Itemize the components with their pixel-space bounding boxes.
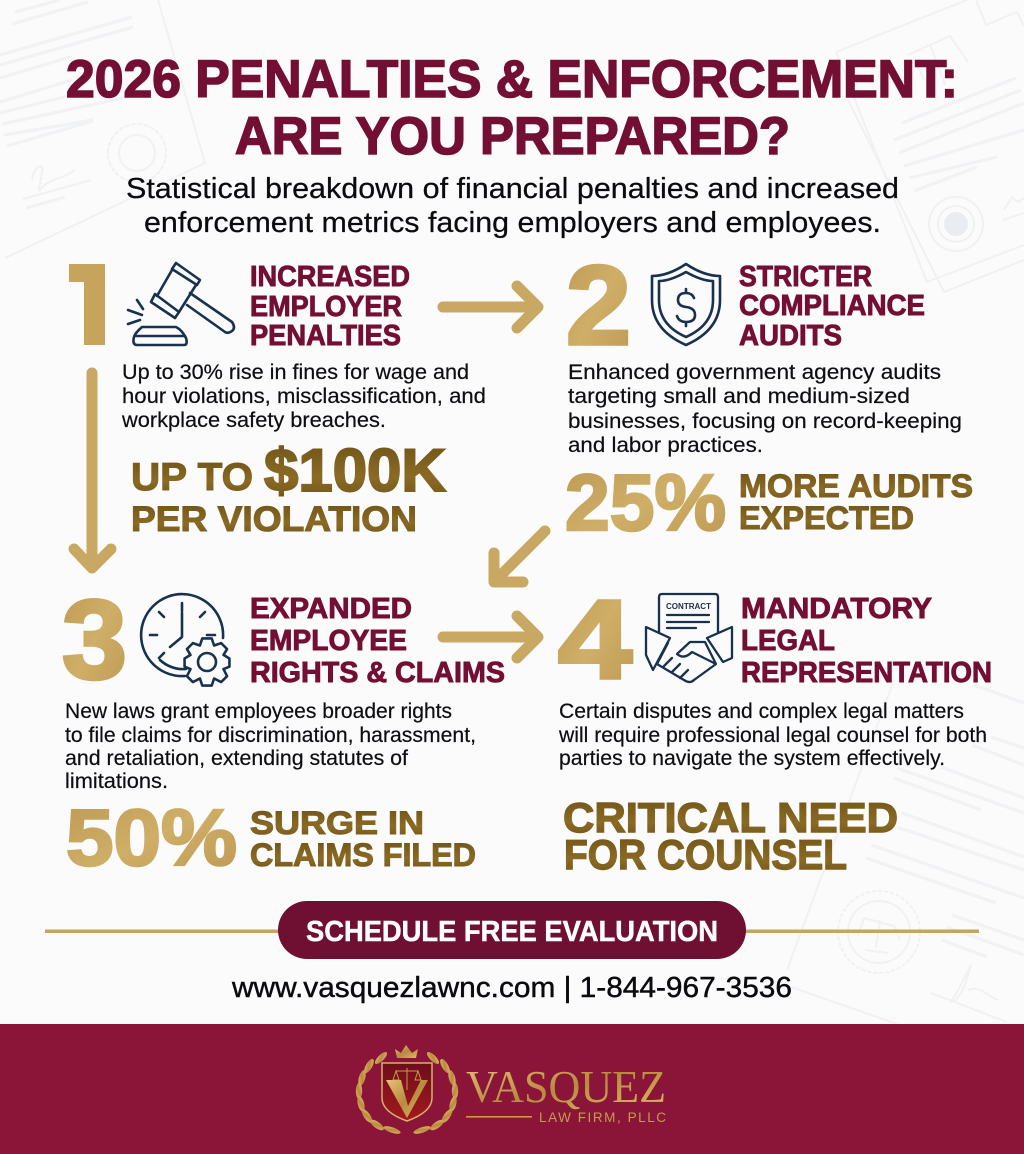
body text: Certain disputes and complex legal matters — [559, 699, 964, 723]
body text — [65, 699, 476, 793]
stat: 25% more audits expected: 25% — [565, 458, 726, 547]
body text: Up to 30% rise in fines for wage and — [122, 360, 469, 384]
heading — [250, 593, 505, 689]
number 3: 3 — [62, 577, 127, 702]
body text: Enhanced government agency audits — [568, 360, 941, 384]
subtitle: Statistical breakdown of financial penalties and increased — [126, 173, 899, 205]
icon: crown — [395, 1045, 418, 1058]
arrow: 1 to 3 — [74, 373, 111, 568]
title — [66, 50, 958, 166]
icon: clock with gear — [141, 594, 229, 686]
stat: 50% surge in claims filed: 50% — [66, 793, 237, 882]
stat: 50% surge in claims filed: SURGE IN — [250, 805, 424, 841]
stat: up to $100K per violation — [131, 437, 446, 539]
body text — [558, 699, 987, 770]
body text: to file claims for discrimination, harassment, — [65, 723, 476, 747]
icon: V monogram — [386, 1080, 428, 1118]
stat: critical need for counsel: FOR COUNSEL — [564, 831, 847, 878]
stat: 25% more audits expected: EXPECTED — [739, 500, 914, 536]
number 1 — [69, 264, 105, 345]
body text: businesses, focusing on record-keeping — [568, 409, 962, 433]
wordmark: VASQUEZ — [466, 1062, 666, 1112]
icon: contract and handshake: CONTRACT — [666, 602, 711, 611]
background watermark: top-right document — [836, 0, 1024, 292]
body text: and labor practices. — [568, 433, 763, 457]
panel: increased employer penalties — [69, 261, 486, 539]
body text: and retaliation, extending statutes of — [65, 746, 408, 770]
arrow: 2 to 3 — [494, 531, 545, 582]
body text: workplace safety breaches. — [121, 408, 386, 432]
heading: PENALTIES — [250, 320, 401, 352]
body text — [121, 360, 486, 432]
call to action: SCHEDULE FREE EVALUATION — [306, 916, 718, 948]
stat: critical need for counsel: CRITICAL NEED — [563, 794, 898, 841]
arrow: 3 to 4 — [443, 616, 538, 658]
heading — [250, 261, 410, 352]
stat: critical need for counsel — [563, 794, 898, 878]
body text — [568, 360, 962, 457]
heading: AUDITS — [739, 320, 842, 352]
panel: expanded employee rights and claims — [62, 577, 505, 882]
panel: mandatory legal representation — [558, 577, 992, 878]
background watermark: bottom-right document — [787, 680, 1024, 1024]
body text: parties to navigate the system effectively. — [559, 746, 945, 770]
heading: EMPLOYER — [250, 291, 402, 323]
footer band — [0, 1024, 1024, 1154]
call to action — [45, 901, 979, 959]
heading — [739, 261, 925, 352]
body text: will require professional legal counsel for both — [558, 723, 987, 747]
background watermark: top-left document — [0, 0, 205, 258]
heading: EXPANDED — [250, 593, 412, 625]
number 4: 4 — [558, 577, 632, 702]
heading: COMPLIANCE — [739, 290, 925, 322]
number 2: 2 — [566, 243, 631, 368]
subtitle: enforcement metrics facing employers and employees. — [144, 207, 881, 239]
heading: REPRESENTATION — [741, 657, 992, 689]
heading: EMPLOYEE — [250, 625, 407, 657]
stat: 50% surge in claims filed — [66, 793, 476, 882]
heading: STRICTER — [739, 261, 872, 293]
contact details: www.vasquezlawnc.com | 1-844-967-3536 — [231, 972, 792, 1004]
heading: LEGAL — [741, 625, 835, 657]
icon: shield with dollar — [652, 264, 720, 345]
icon: contract and handshake — [646, 594, 732, 682]
heading: INCREASED — [250, 261, 410, 293]
title: ARE YOU PREPARED? — [235, 107, 790, 166]
wordmark: LAW FIRM, PLLC — [539, 1110, 666, 1125]
icon: laurel wreath — [356, 1050, 458, 1135]
icon: scales — [393, 1068, 421, 1090]
body text: New laws grant employees broader rights — [65, 699, 452, 723]
heading: MANDATORY — [741, 593, 932, 625]
stat: 25% more audits expected — [565, 458, 973, 547]
panel: stricter compliance audits — [565, 243, 973, 547]
subtitle — [126, 173, 899, 239]
stat: 50% surge in claims filed: CLAIMS FILED — [250, 837, 476, 873]
stat: up to $100K per violation: $100K — [264, 437, 446, 504]
arrow: 1 to 2 — [443, 286, 538, 328]
icon: shield — [382, 1063, 432, 1121]
heading — [741, 593, 992, 689]
stat: up to $100K per violation: UP TO — [131, 456, 253, 499]
heading: RIGHTS & CLAIMS — [250, 657, 505, 689]
body text: limitations. — [65, 769, 168, 793]
icon: gavel — [128, 263, 234, 345]
title: 2026 PENALTIES & ENFORCEMENT: — [66, 50, 958, 109]
logo — [356, 1045, 666, 1135]
body text: targeting small and medium-sized — [568, 384, 910, 408]
body text: hour violations, misclassification, and — [122, 384, 486, 408]
stat: up to $100K per violation: PER VIOLATION — [131, 500, 417, 539]
stat: 25% more audits expected: MORE AUDITS — [739, 468, 973, 504]
